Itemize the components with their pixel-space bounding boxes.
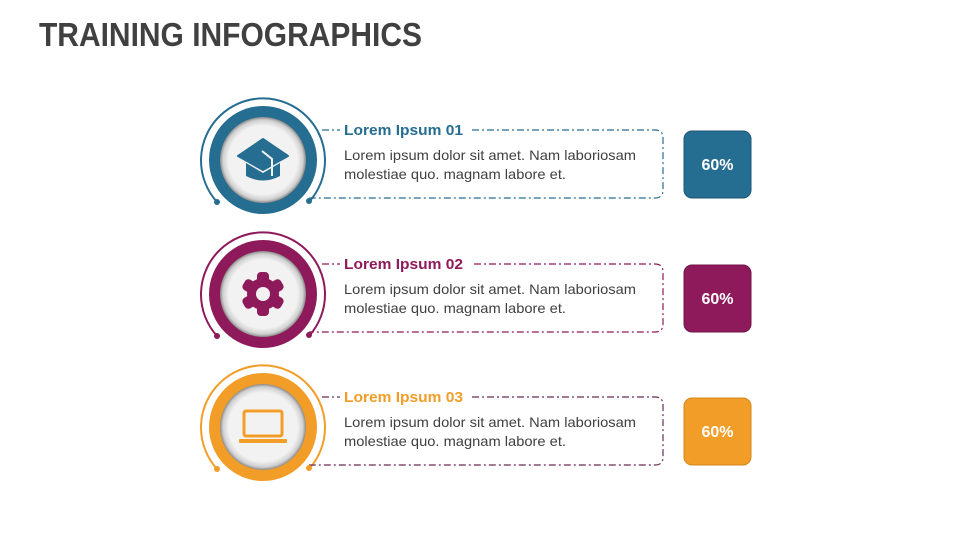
- icon: gear: [241, 272, 285, 316]
- title: TRAINING INFOGRAPHICS: [39, 16, 422, 53]
- text box 1: Lorem ipsum dolor sit amet. Nam laboriosam: [344, 147, 636, 163]
- row 2: [201, 232, 751, 348]
- text box 3: molestiae quo. magnam labore et.: [344, 433, 566, 449]
- icon circle 2: [201, 232, 325, 348]
- row 3: [201, 365, 751, 481]
- icon circle 1: [201, 98, 325, 214]
- percent box 2: 60%: [701, 291, 734, 308]
- icon circle 3: [201, 365, 325, 481]
- icon: laptop: [239, 411, 287, 443]
- text box 2: molestiae quo. magnam labore et.: [344, 300, 566, 316]
- percent box 1: 60%: [701, 157, 734, 174]
- percent box 3: 60%: [701, 424, 734, 441]
- icon: graduation cap: [238, 139, 288, 180]
- text box 3: [306, 389, 663, 471]
- text box 2: Lorem ipsum dolor sit amet. Nam laboriosam: [344, 281, 636, 297]
- text box 1: molestiae quo. magnam labore et.: [344, 166, 566, 182]
- text box 2: [306, 256, 663, 338]
- percent box 2: [684, 265, 751, 332]
- row 1: [201, 98, 751, 214]
- text box 2: Lorem Ipsum 02: [344, 256, 463, 273]
- text box 3: Lorem ipsum dolor sit amet. Nam laboriosam: [344, 414, 636, 430]
- percent box 3: [684, 398, 751, 465]
- percent box 1: [684, 131, 751, 198]
- text box 1: Lorem Ipsum 01: [344, 122, 463, 139]
- text box 3: Lorem Ipsum 03: [344, 389, 463, 406]
- text box 1: [306, 122, 663, 204]
